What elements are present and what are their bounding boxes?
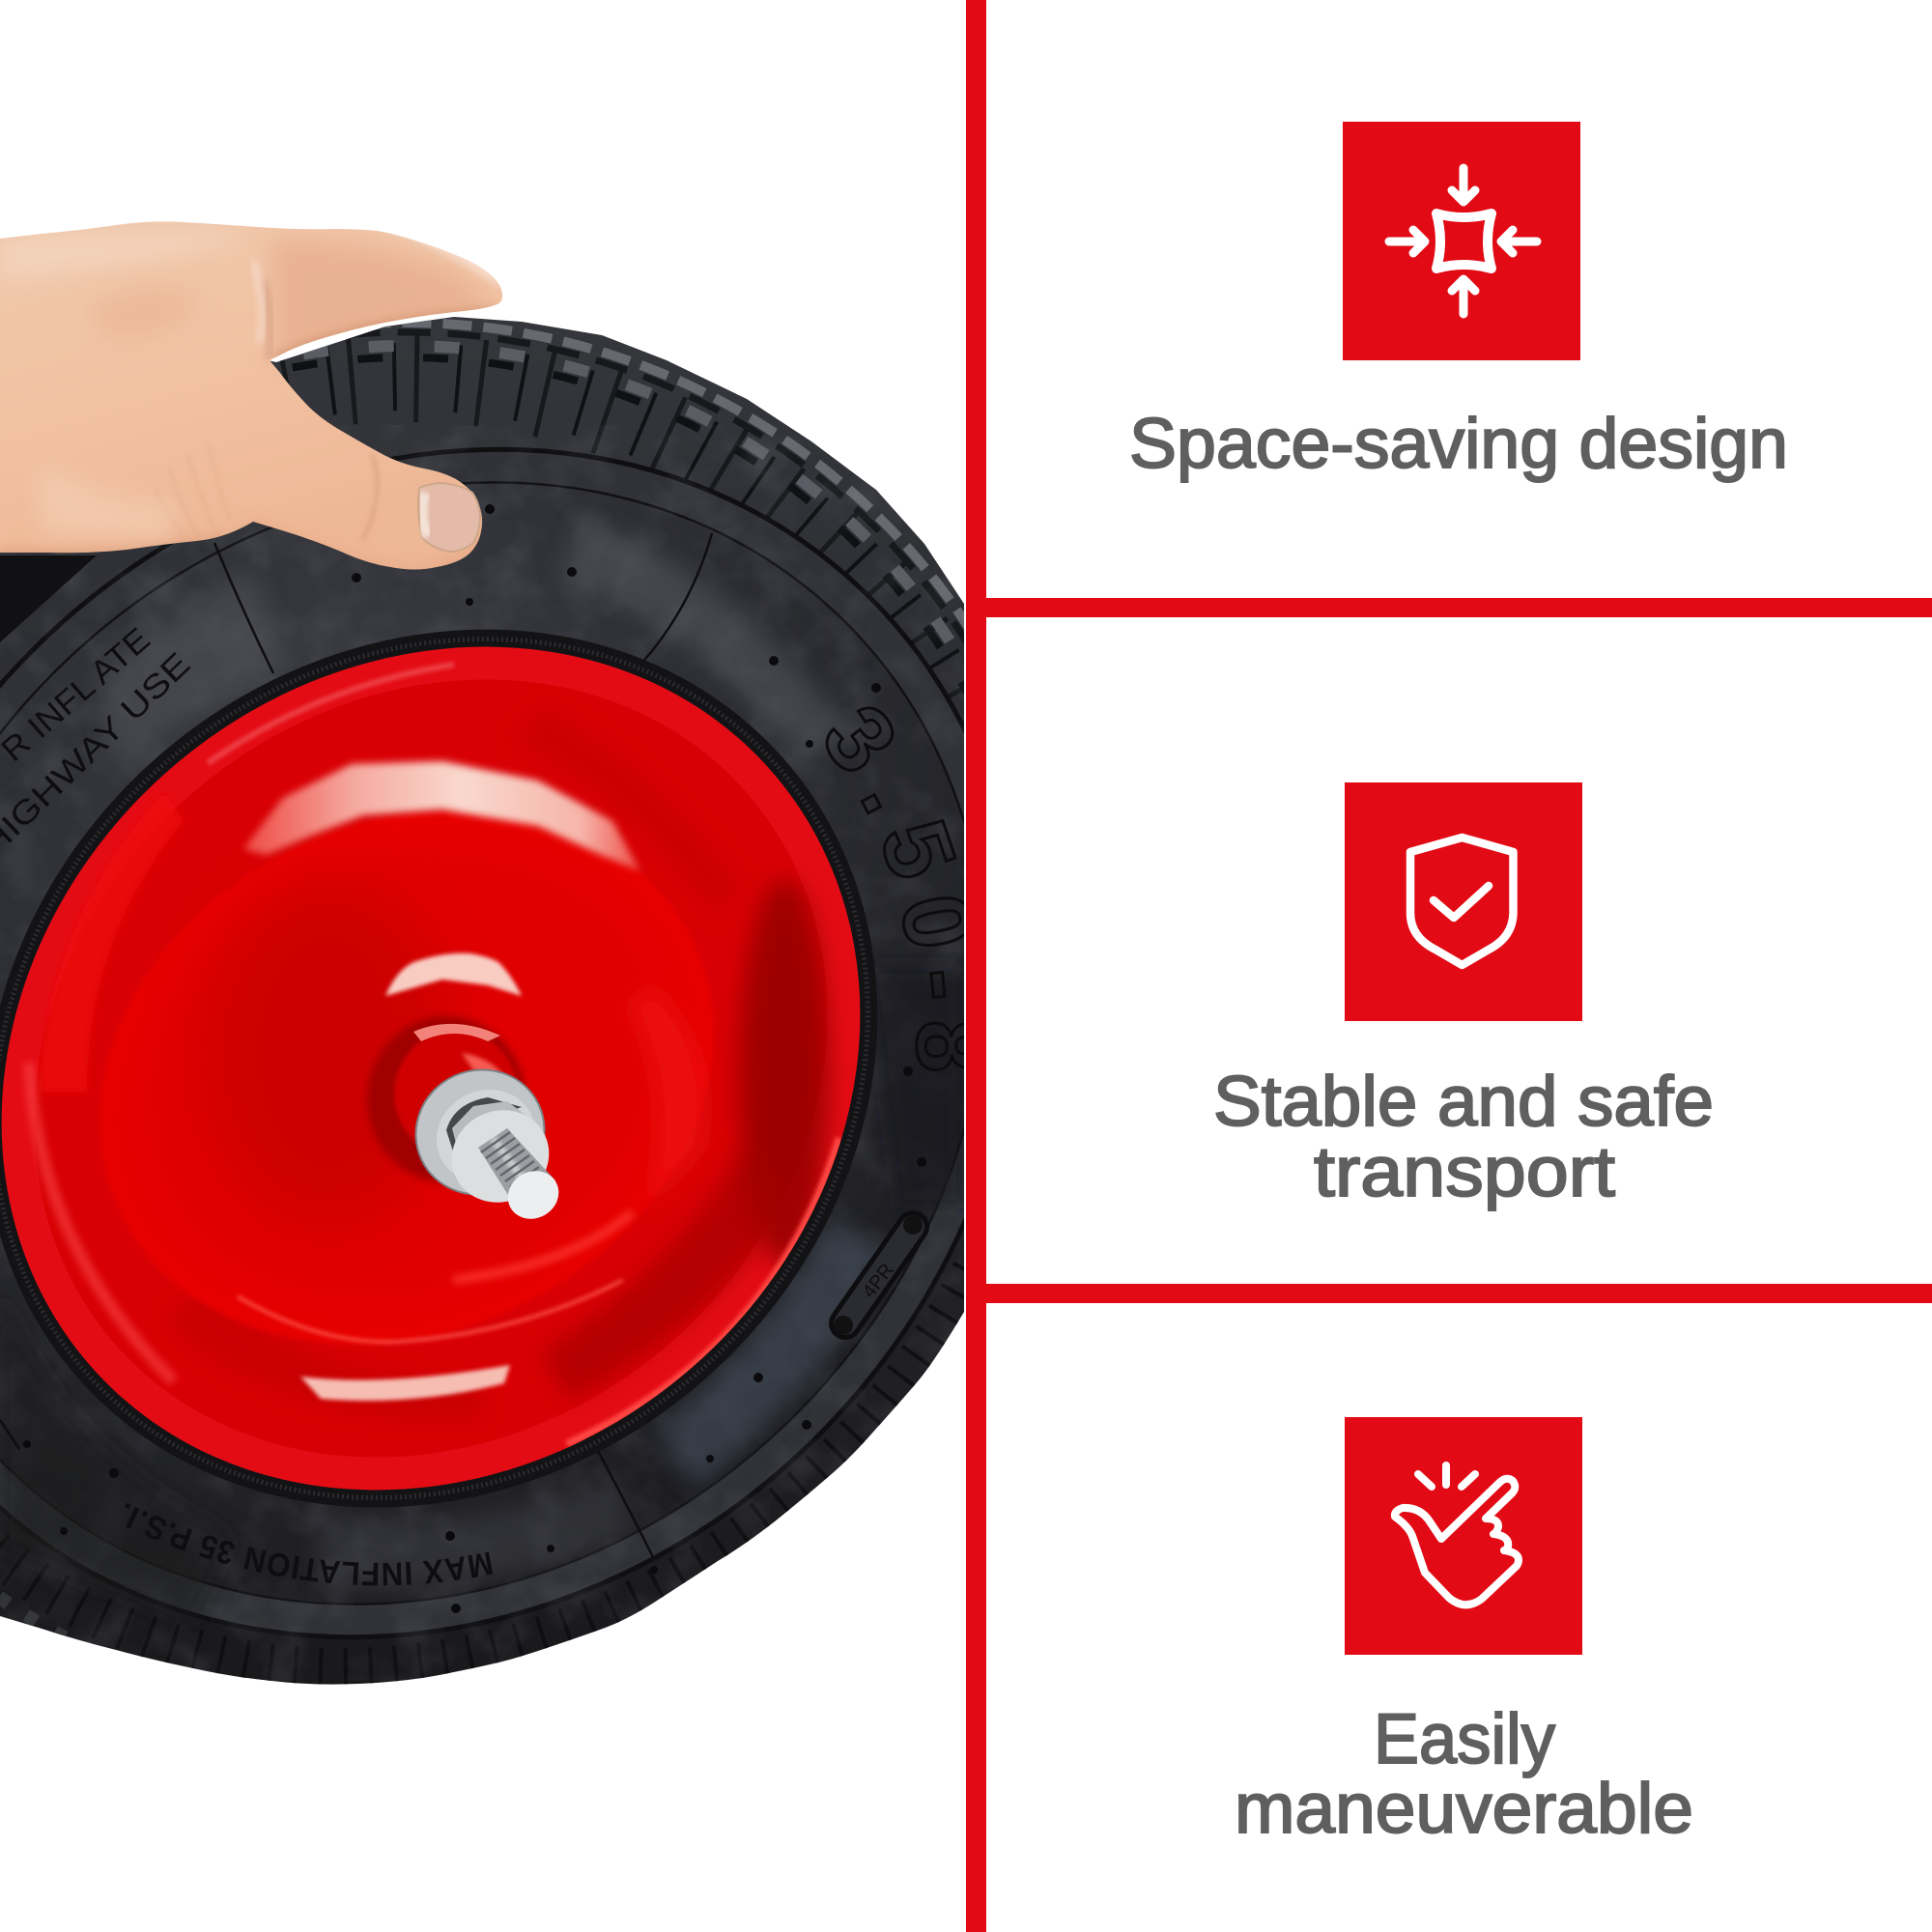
panel: stable and safe transport [1213, 782, 1714, 1211]
red steel rim [2, 647, 860, 1490]
heading: stable and safe transport: Stable and safe [1213, 1063, 1714, 1141]
icon: compress square [1343, 122, 1580, 360]
hand [0, 221, 502, 599]
panel: easily maneuverable [1235, 1417, 1693, 1848]
nut gap [446, 1097, 522, 1154]
dish [100, 811, 713, 1345]
panel: space-saving design [1129, 122, 1788, 483]
tire [0, 317, 964, 1685]
threaded stud [478, 1128, 555, 1206]
thumbnail [418, 483, 480, 552]
dark gap at far left [0, 555, 97, 642]
lower highlight [300, 1365, 510, 1401]
panel: wheel photo [0, 221, 964, 1685]
rim channel [35, 680, 827, 1457]
sidewall mottling [0, 425, 966, 1681]
upper highlight [243, 761, 640, 871]
icon: finger snap hand [1345, 1417, 1582, 1655]
front washer [437, 1094, 564, 1218]
sidewall pimples [23, 504, 926, 1613]
valve plate: 4PR [859, 1260, 898, 1302]
axle bolt [415, 1068, 558, 1219]
top hub highlight [385, 953, 522, 996]
heading: easily maneuverable: Easily [1374, 1700, 1555, 1778]
hand shading [270, 242, 493, 362]
icon: shield with check [1345, 782, 1582, 1021]
stud tip [499, 1162, 567, 1228]
hub recess [367, 1016, 526, 1182]
rim bead ring [0, 630, 877, 1507]
heading: easily maneuverable [1235, 1700, 1693, 1848]
lip highlights [567, 1138, 839, 1444]
heading: space-saving design: Space-saving design [1129, 405, 1788, 483]
tire text: size: 3.50-8 [825, 707, 964, 1071]
sidewall shading patches [0, 522, 964, 1623]
tread pattern [0, 319, 964, 1685]
heading: easily maneuverable: maneuverable [1235, 1770, 1693, 1848]
mould lines [0, 533, 712, 1557]
panel dividers [966, 0, 1932, 1932]
nut [452, 1101, 526, 1142]
heading: stable and safe transport [1213, 1063, 1714, 1211]
heading: stable and safe transport: transport [1314, 1133, 1615, 1211]
dish shading [203, 879, 454, 1227]
tire text: max inflation: MAX INFLATION 35 P.S.I. [126, 1503, 493, 1586]
tire sidewall [0, 471, 964, 1634]
rear washer [415, 1068, 545, 1196]
valve plate [834, 1215, 923, 1335]
